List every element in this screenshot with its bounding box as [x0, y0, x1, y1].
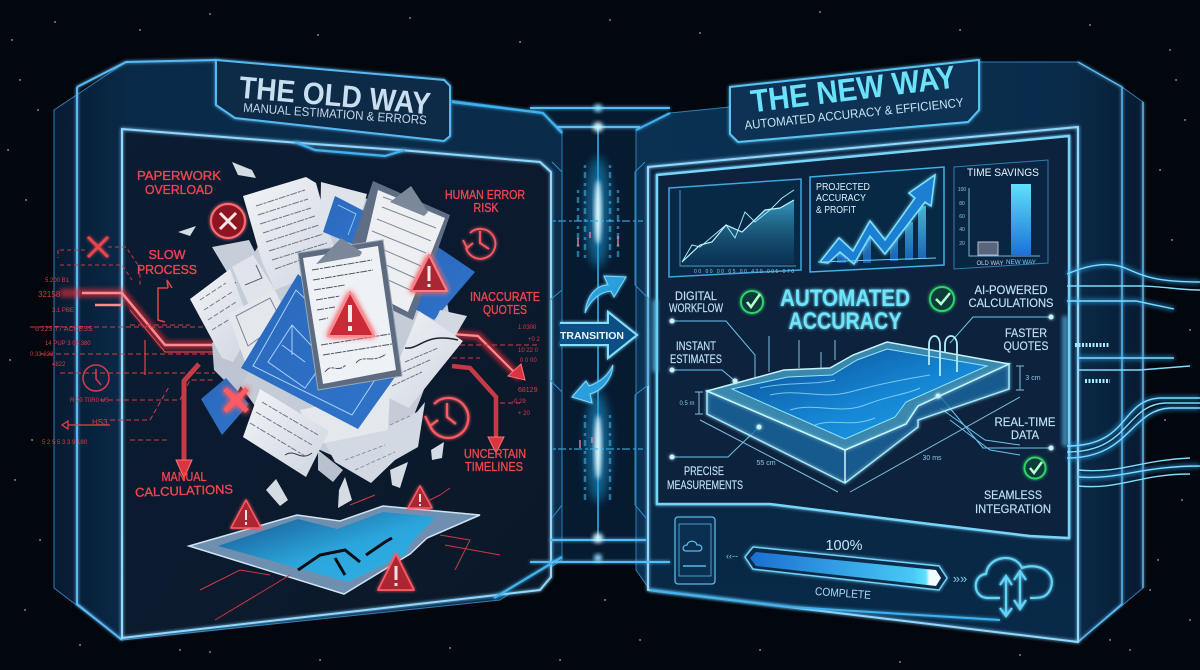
label: real-time data: REAL-TIME [994, 415, 1056, 429]
label: digital workflow: DIGITAL [675, 289, 717, 303]
icon: small clock [83, 365, 109, 391]
heading: automated accuracy: ACCURACY [788, 308, 902, 335]
paper: crease [232, 255, 275, 305]
label: ai-powered calculations: AI-POWERED [974, 283, 1048, 297]
dimension labels: 30 ms [922, 455, 942, 462]
label: digital workflow [669, 289, 724, 315]
axis labels: OLD WAY [976, 260, 1004, 267]
pool deck [707, 342, 1009, 450]
warning: pool top [408, 486, 432, 508]
warning: pool left [231, 500, 261, 528]
label: real-time data: DATA [1011, 428, 1039, 442]
icon: check digital workflow [741, 291, 763, 313]
warning: back clipboard [411, 255, 447, 291]
blueprint: top back [323, 196, 364, 244]
label: manual calculations: MANUAL [162, 470, 207, 484]
red margin data text: HS3 [92, 418, 108, 427]
label: uncertain timelines: UNCERTAIN [464, 447, 526, 461]
label: inaccurate quotes [470, 290, 540, 317]
dimension marks behind pool [695, 336, 1024, 492]
broken pool [189, 488, 500, 620]
progress arrows left: ‹‹-- [726, 551, 738, 561]
red margin data text: 10 22 0 [518, 348, 539, 354]
panel: center strip backing [530, 108, 670, 562]
label: faster quotes: QUOTES [1004, 339, 1048, 353]
red dashed tree near x [58, 247, 140, 285]
paper pile [190, 177, 475, 483]
paper: right lower [379, 311, 463, 408]
label: inaccurate quotes: INACCURATE [470, 290, 540, 304]
paper: left [190, 269, 252, 362]
subtitle: automated accuracy and efficiency: AUTOMATED ACCURACY & EFFICIENCY [744, 95, 965, 132]
label: transition: TRANSITION [560, 330, 624, 342]
paper: upper left [243, 177, 346, 290]
icon: check seamless integration [1024, 458, 1046, 478]
axis labels: 80 [959, 201, 965, 207]
heading: automated accuracy [780, 285, 910, 335]
axis labels: 100 [958, 187, 966, 193]
pool ladder [929, 336, 957, 376]
paper scraps [178, 162, 444, 508]
red margin data text: + 20 [518, 411, 531, 417]
red margin data text: R 20 T0R0 US [70, 398, 109, 404]
icon: red x [225, 389, 247, 411]
warning: pool bottom [378, 554, 414, 590]
blueprint: right back [415, 247, 475, 320]
callout leader lines [672, 317, 1051, 457]
callout dots [672, 317, 1051, 457]
chart: time savings [954, 160, 1048, 269]
chart: projected accuracy and profit [810, 167, 944, 272]
pool: 3d model [707, 336, 1009, 483]
paper: back left lower [212, 330, 250, 393]
paper: framed drawing [228, 290, 291, 362]
red margin data text: 0 0 00 [520, 358, 537, 364]
heading: automated accuracy: AUTOMATED [780, 285, 910, 312]
paper: far right scrap [430, 310, 467, 345]
blueprint: main [241, 274, 400, 429]
red margin data text: 68129 [518, 387, 538, 394]
title: the new way: THE NEW WAY [749, 59, 957, 119]
label: human error risk: RISK [474, 201, 499, 215]
label: digital workflow: WORKFLOW [669, 301, 724, 315]
data streams: right [1067, 265, 1200, 487]
red margin data text: 5.200 B1 [45, 278, 70, 284]
header: the new way [730, 59, 979, 142]
paper: bottom left [243, 389, 329, 477]
red margin data text: 5 2 5 5 3 3 9 180 [42, 440, 88, 446]
red margin data text: 3.1 PBE [52, 308, 74, 314]
arrow: transition [560, 312, 637, 358]
label: projected accuracy and profit: PROJECTED [816, 182, 870, 193]
label: faster quotes: FASTER [1005, 326, 1047, 340]
paper: backing mass [222, 195, 450, 470]
label: ai-powered calculations: CALCULATIONS [968, 296, 1054, 310]
axis labels: NEW WAY [1006, 259, 1037, 266]
label: projected accuracy and profit: ACCURACY [816, 193, 866, 204]
red margin data text: 14 PUP 3 06 380 [45, 341, 91, 347]
label: precise measurements [667, 464, 743, 492]
label: manual calculations: CALCULATIONS [135, 482, 233, 500]
label: uncertain timelines [464, 447, 526, 474]
panel: new way frame [636, 62, 1143, 642]
red circuit lines: left [30, 280, 215, 478]
icon: tablet [675, 517, 715, 584]
label: projected accuracy and profit [816, 182, 870, 216]
progress arrows right: »» [953, 571, 967, 586]
icon: check ai calculations [930, 287, 954, 311]
clipboard: back [350, 181, 450, 320]
arrow: curved up [585, 276, 626, 313]
bar: old way [978, 242, 998, 255]
label: slow process: SLOW [148, 248, 186, 262]
red margin data text: -0 29 [512, 399, 526, 405]
dimension labels [679, 375, 1041, 467]
clipboard: main [298, 238, 402, 390]
icon: x circle [211, 204, 245, 238]
label: seamless integration [975, 488, 1051, 516]
label: precise measurements: MEASUREMENTS [667, 478, 743, 492]
label: paperwork overload [137, 169, 222, 197]
label: ai-powered calculations [968, 283, 1054, 310]
label: projected accuracy and profit: & PROFIT [816, 205, 856, 216]
dimension labels: 3 cm [1025, 375, 1041, 382]
red circuit lines: right [452, 334, 540, 453]
label: faster quotes [1004, 326, 1048, 353]
axis labels [958, 187, 1037, 267]
paper: far back left [212, 240, 272, 286]
red margin data text [30, 278, 541, 446]
warning: main clipboard [328, 292, 374, 336]
subtitle: manual estimation and errors: MANUAL ESTIMATION & ERRORS [243, 101, 427, 127]
red margin data text: 0 33 322 [30, 352, 54, 358]
dimension labels: 0.5 m [679, 401, 695, 407]
label: uncertain timelines: TIMELINES [465, 460, 523, 474]
icon: cloud sync [976, 558, 1052, 616]
red margin data text: +0 2 [528, 337, 541, 343]
label: instant estimates: INSTANT [676, 339, 717, 353]
center divider strip [530, 104, 670, 562]
icon: clock risk [463, 229, 495, 259]
label: 100 percent: 100% [826, 537, 862, 554]
paper: back top [320, 182, 367, 244]
label: seamless integration: INTEGRATION [975, 502, 1051, 516]
label: real-time data [994, 415, 1056, 442]
blueprint: bottom left [201, 378, 249, 435]
progress bar [745, 547, 947, 590]
label: inaccurate quotes: QUOTES [483, 303, 527, 317]
label: seamless integration: SEAMLESS [984, 488, 1042, 502]
label: instant estimates: ESTIMATES [670, 352, 722, 366]
panel: old way frame [54, 60, 562, 640]
label: time savings: TIME SAVINGS [967, 167, 1039, 179]
axis labels: 20 [959, 241, 965, 247]
red margin data text: 32158 [38, 290, 61, 299]
axis labels: 60 [959, 214, 965, 220]
label: human error risk [445, 188, 525, 215]
label: slow process [137, 248, 197, 277]
label: human error risk: HUMAN ERROR [445, 188, 525, 202]
red margin data text: 4822 [52, 362, 66, 368]
label: precise measurements: PRECISE [684, 464, 724, 478]
label: complete: COMPLETE [815, 586, 872, 602]
label: paperwork overload: OVERLOAD [145, 183, 213, 197]
red margin data text: 6 223 77 ACCESS [35, 326, 93, 333]
axis labels: 40 [959, 227, 965, 233]
label: instant estimates [670, 339, 722, 366]
chart: line chart [669, 179, 801, 277]
label: slow process: PROCESS [137, 263, 197, 277]
bar: new way [1011, 184, 1031, 255]
dimension labels: 55 cm [756, 460, 776, 467]
arrow: curved down [572, 365, 613, 403]
label: paperwork overload: PAPERWORK [137, 169, 222, 183]
pool water [732, 349, 987, 439]
chart: line chart: 00 00 00 05 00 420 005 070 [694, 269, 794, 275]
icon: small red x [88, 237, 108, 257]
paper: bottom stack [300, 390, 425, 483]
title: the old way: THE OLD WAY [238, 70, 432, 121]
label: manual calculations [135, 470, 233, 500]
red margin data text: 1.0300 [518, 325, 537, 331]
header: the old way [216, 60, 450, 141]
pool walls [707, 364, 1009, 483]
icon: clock timelines [425, 398, 468, 438]
